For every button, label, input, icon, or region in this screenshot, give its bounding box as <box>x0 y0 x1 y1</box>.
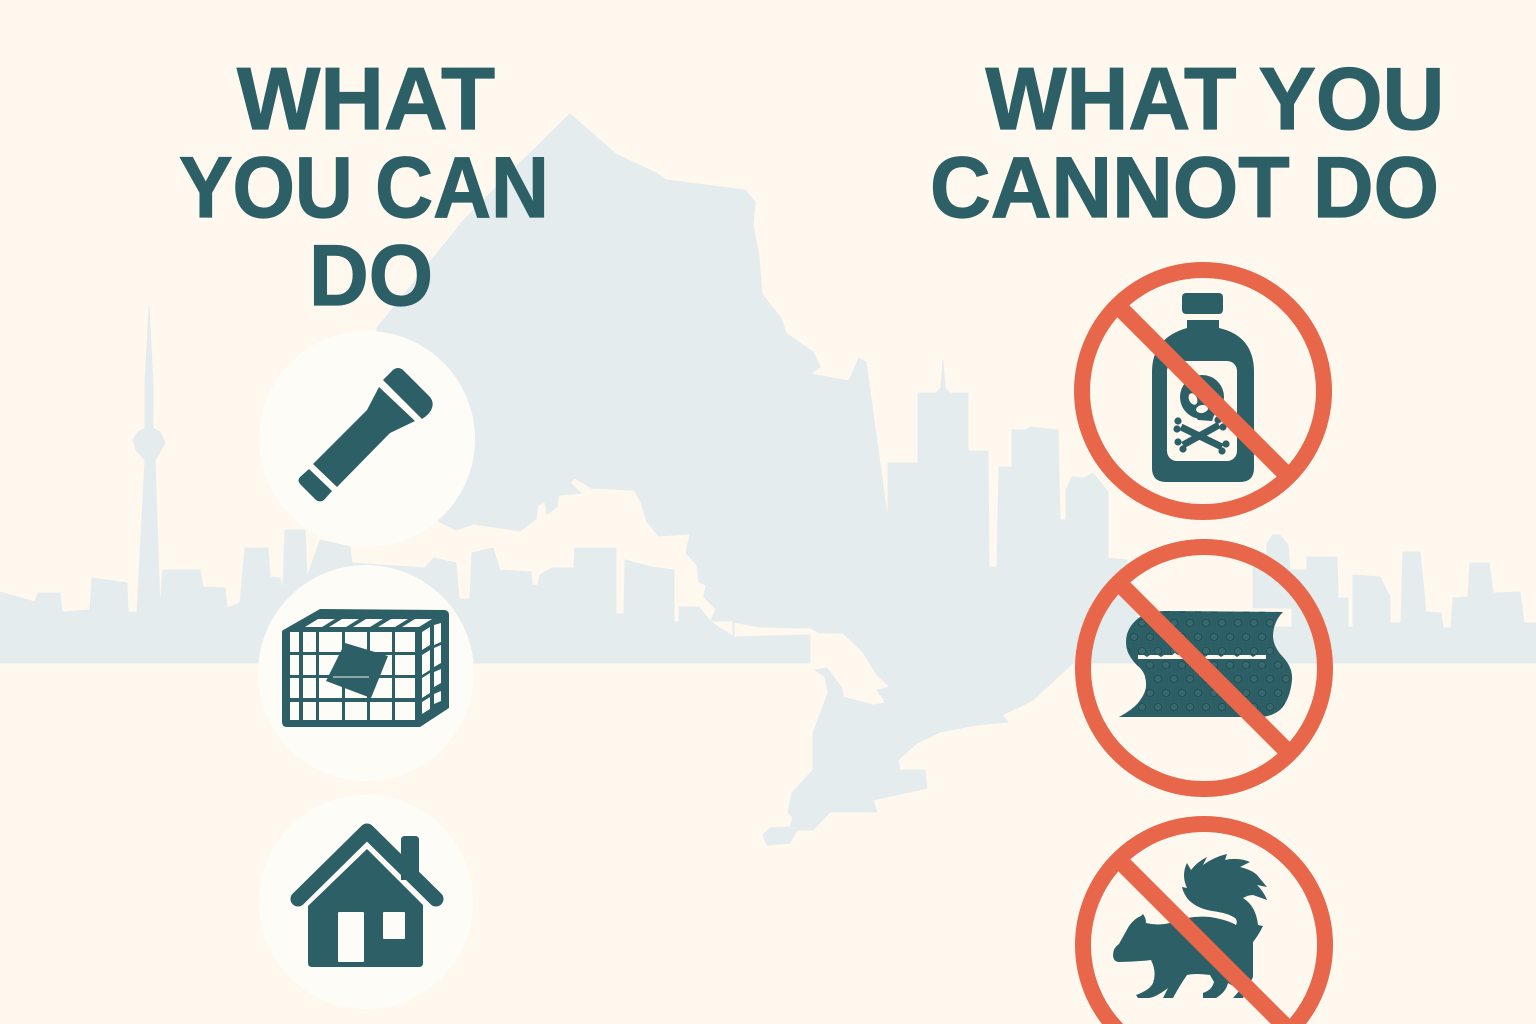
heading: what you can do: DO <box>309 228 433 324</box>
icon: no poison bottle <box>1082 270 1324 512</box>
background: city skyline right <box>888 360 1536 663</box>
icon: flashlight in circle <box>259 331 475 547</box>
icon: live trap cage in circle <box>258 565 474 781</box>
heading: what you cannot do: CANNOT DO <box>930 140 1439 236</box>
icon: no skunk <box>1083 824 1325 1024</box>
heading: what you can do: YOU CAN <box>179 140 549 236</box>
background: Toronto skyline left with CN Tower <box>0 307 810 663</box>
icon: house in circle <box>259 795 473 1009</box>
icon: no glue trap / sticky sponge <box>1083 547 1325 789</box>
heading: what you cannot do <box>930 49 1444 236</box>
background: Ontario map silhouette <box>377 114 1073 845</box>
heading: what you cannot do: WHAT YOU <box>986 49 1444 148</box>
heading: what you can do: WHAT <box>237 49 495 148</box>
heading: what you can do <box>179 49 549 324</box>
